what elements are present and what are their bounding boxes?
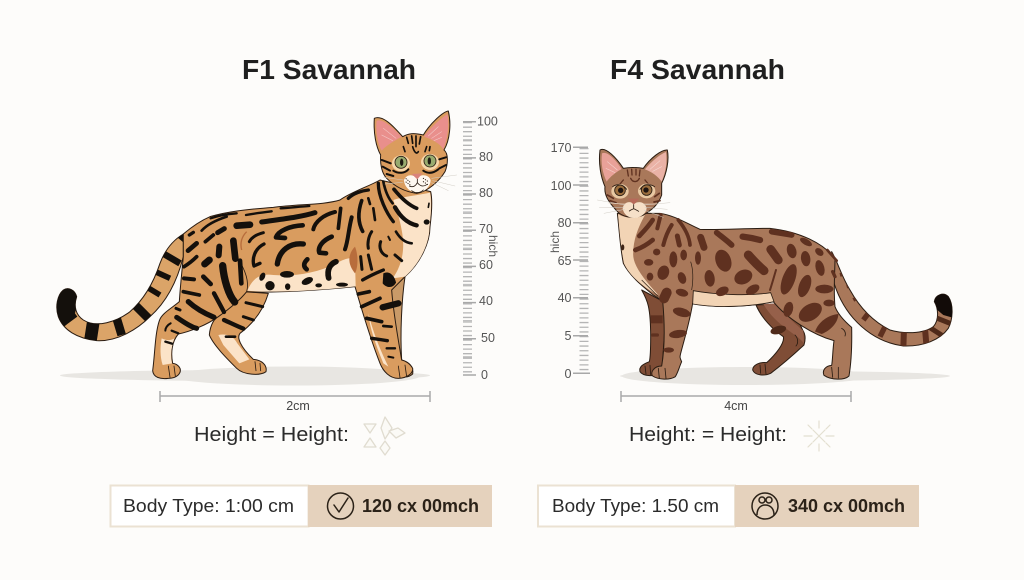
F4 ruler labels: 170 [551, 141, 572, 155]
F4 ruler unit label: hich [548, 231, 562, 253]
belly cream [693, 291, 774, 306]
F4 ruler labels: 0 [565, 367, 572, 381]
icon: check circle [328, 493, 354, 519]
icon: F4 starburst [804, 421, 834, 451]
body markings [165, 182, 430, 358]
stat bar: F1 [110, 485, 492, 527]
whiskers [597, 200, 670, 217]
F4 length dimension [621, 391, 851, 413]
F1 ruler labels: 80 [479, 186, 493, 200]
forehead stripes [403, 136, 430, 153]
nose [412, 173, 422, 179]
stat bar: F4 [538, 485, 919, 527]
nose [628, 199, 639, 205]
F1 ruler labels: 70 [479, 222, 493, 236]
body [617, 213, 852, 379]
tail [53, 233, 187, 343]
F4 ruler labels: 100 [551, 179, 572, 193]
ground shadow: F1 [60, 366, 430, 386]
F4 ruler labels: 5 [565, 329, 572, 343]
whiskers [383, 175, 457, 191]
stat bar: F1: 120 cx 00mch [362, 496, 479, 516]
head [597, 149, 670, 218]
ears inner [376, 120, 402, 151]
muzzle [404, 175, 431, 193]
far hind leg [209, 292, 268, 374]
F4 length dimension: 4cm [724, 399, 748, 413]
F1 length dimension: 2cm [286, 399, 310, 413]
ears inner [602, 153, 622, 182]
body [153, 180, 432, 379]
F1 ruler labels: 80 [479, 150, 493, 164]
eyes [392, 155, 410, 171]
F1 height formula: Height = Height: [194, 424, 349, 446]
shoulder shading [349, 247, 357, 273]
F1 ruler labels: 50 [481, 331, 495, 345]
F1 ruler unit label: hich [486, 235, 500, 257]
body spots [621, 215, 838, 353]
eyes [611, 184, 629, 199]
title: F4 Savannah: F4 Savannah [610, 54, 785, 85]
F1 ruler labels: 0 [481, 368, 488, 382]
head [374, 111, 457, 193]
stat bar: F4: Body Type: 1.50 cm [552, 496, 719, 516]
face stripes [382, 157, 446, 176]
stat bar: F4: 340 cx 00mch [788, 496, 905, 516]
F4 cat illustration [597, 149, 958, 379]
F4 ruler labels: 65 [558, 254, 572, 268]
F1 ruler labels: 100 [477, 114, 498, 128]
far front leg [391, 277, 413, 377]
far front leg [640, 290, 667, 376]
muzzle [623, 202, 647, 218]
chest cream [618, 214, 658, 295]
F1 height ruler [463, 114, 498, 382]
stat bar: F1: Body Type: 1:00 cm [123, 496, 294, 516]
F1 length dimension [160, 391, 430, 413]
F1 ruler labels: 60 [479, 258, 493, 272]
F1 ruler labels [477, 114, 498, 382]
far hind leg [753, 303, 805, 375]
icon: people circle [752, 493, 778, 519]
F4 ruler labels: 40 [558, 291, 572, 305]
F1 ruler labels: 40 [479, 294, 493, 308]
forehead stripes [620, 169, 648, 184]
F4 ruler labels: 80 [558, 216, 572, 230]
tail [831, 251, 953, 346]
F4 ruler labels [551, 141, 572, 381]
F4 height formula: Height: = Height: [629, 424, 787, 446]
title: F1 Savannah: F1 Savannah [242, 54, 416, 85]
icon: F1 leaf sparkle [364, 417, 405, 455]
hip line [237, 257, 248, 292]
ground shadow: F4 [620, 367, 950, 385]
paw and leg details [658, 328, 845, 378]
belly and chest cream [161, 193, 431, 367]
F1 cat illustration [53, 111, 457, 379]
F4 height ruler [551, 141, 590, 381]
paw toes [168, 365, 407, 378]
